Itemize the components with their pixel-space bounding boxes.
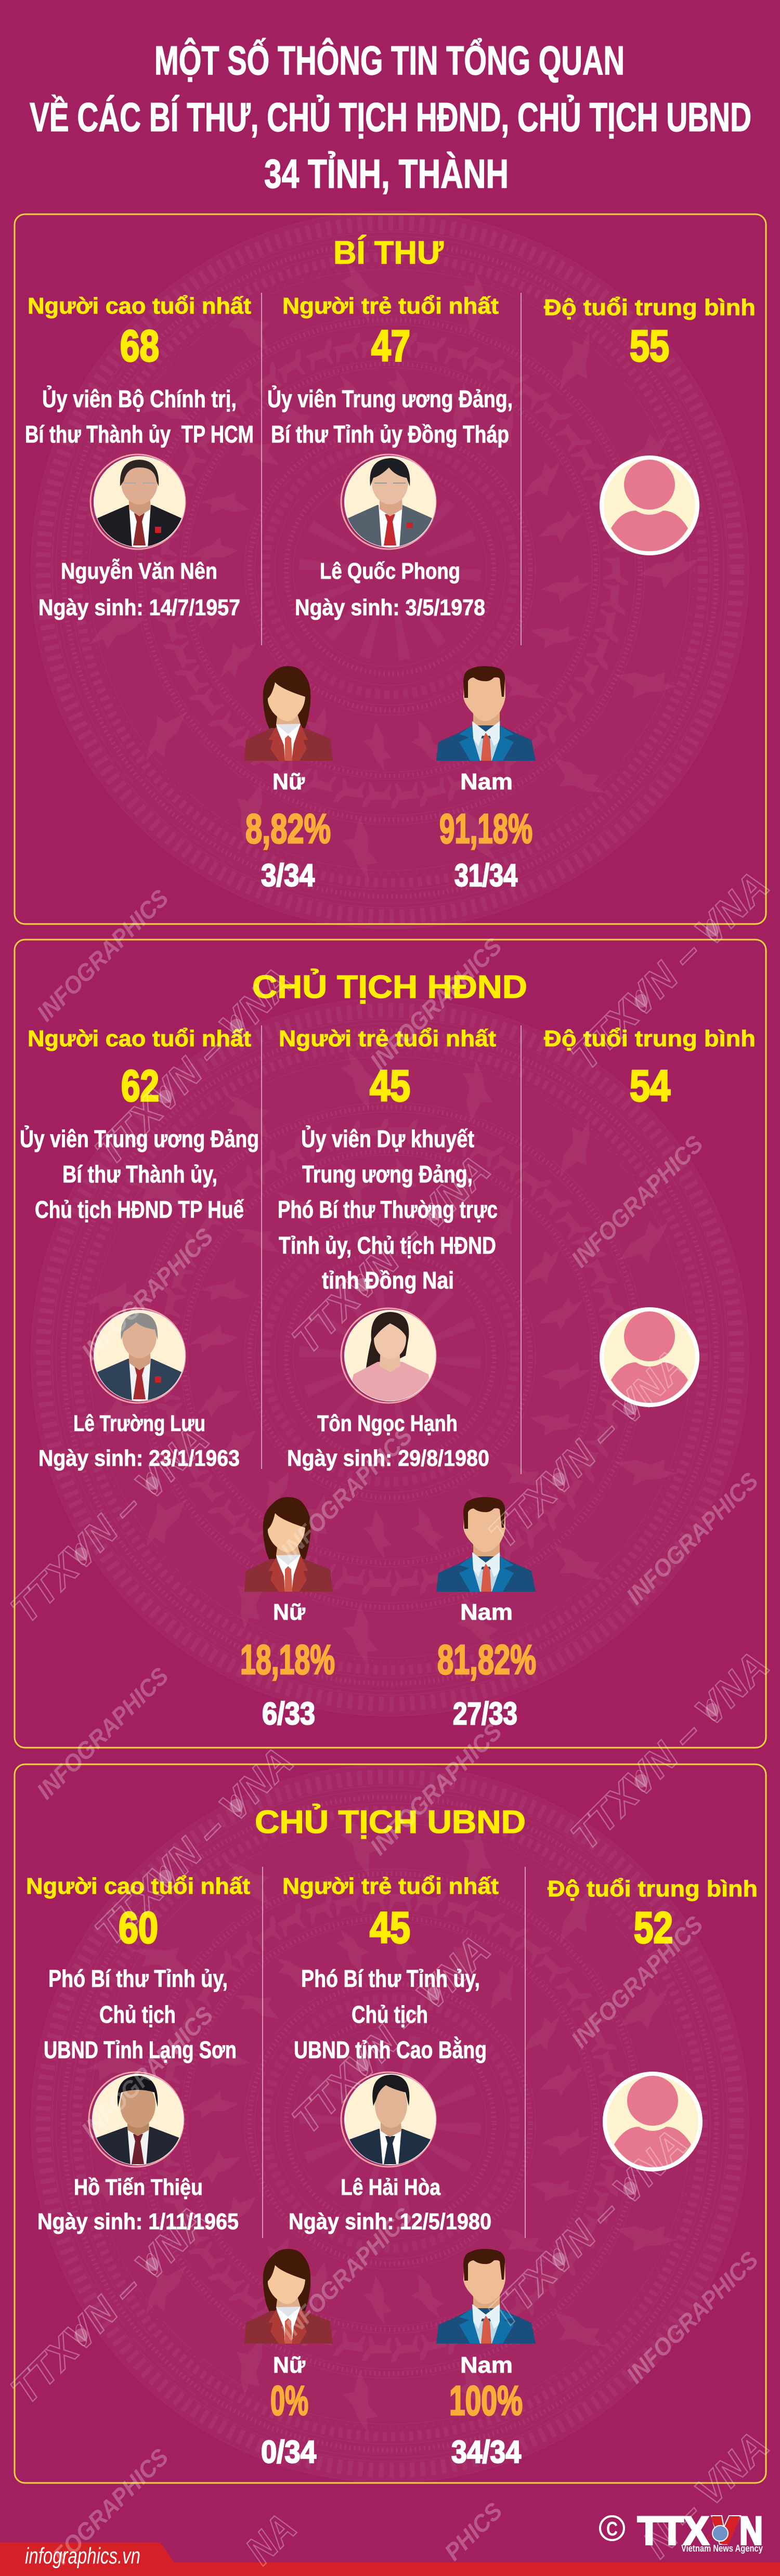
title: 34 TỈNH, THÀNH [264,151,509,197]
icon: anonymous person [600,456,699,555]
column: youngest: tỉnh Đồng Nai [322,1267,454,1294]
watermarks: INFOGRAPHICS [76,1222,218,1365]
column: average age [544,1026,756,1407]
column: oldest: Bí thư Thành ủy TP HCM [25,421,254,448]
column: oldest: Chủ tịch [99,2001,176,2028]
gender: women: 3/34 [261,858,315,893]
panel: Chủ tịch HĐND [15,940,766,1748]
watermarks: INFOGRAPHICS [31,884,174,1026]
portrait: Lê Hải Hòa [341,2072,437,2169]
column: youngest: Lê Quốc Phong [320,558,460,584]
column: oldest: Người cao tuổi nhất [28,1026,251,1051]
logo: TTXVN [600,2509,763,2554]
icon: anonymous person [603,2072,703,2171]
watermarks: INFOGRAPHICS [621,1467,763,1609]
watermarks: TTXVN – VNA [2,1416,218,1632]
background drum: panel 1 [0,147,749,929]
column: oldest: 68 [120,321,159,370]
watermarks: INFOGRAPHICS [566,1910,708,2053]
watermarks: FOGRAPHICS [47,2443,174,2569]
column: average age: 52 [634,1903,673,1952]
portrait: Lê Trường Lưu [90,1308,186,1405]
column: oldest: 60 [119,1903,158,1952]
gender: women: 0/34 [261,2435,317,2469]
column: youngest: Phó Bí thư Thường trực [278,1196,498,1223]
background drum: panel 2 [0,934,749,1716]
column: oldest [25,293,254,620]
portrait: Tôn Ngọc Hạnh [341,1308,437,1405]
column: average age [548,1876,758,2171]
title [30,37,751,197]
column: youngest: Ủy viên Dự khuyết [301,1125,474,1152]
column: average age: 54 [630,1061,670,1110]
gender: men [436,2249,536,2469]
logo: TTXVN: N [739,2509,763,2553]
watermarks: TTXVN – VNA [480,2122,696,2337]
gender: women: Nữ [272,769,305,795]
column: oldest: Phó Bí thư Tỉnh ủy, [48,1965,228,1992]
watermarks: TTXVN – VNA [283,1927,499,2142]
column: youngest: Lê Hải Hòa [341,2175,440,2200]
background drum: panel 3 [0,1700,749,2482]
column: youngest: Trung ương Đảng, [302,1161,473,1188]
portrait: Lê Quốc Phong [341,454,437,551]
column: youngest: 45 [370,1061,410,1110]
watermarks: TTXVN – VNA [2,2197,218,2413]
gender: women: 8,82% [245,805,331,852]
column: average age [544,295,756,555]
gender: women [244,2249,333,2469]
column: oldest: Ủy viên Bộ Chính trị, [42,385,237,412]
column: oldest: Nguyễn Văn Nên [61,558,217,584]
watermarks: INFOGRAPHICS [275,1422,418,1564]
column: oldest [20,1026,259,1471]
watermarks: N – VNA [634,2423,777,2566]
gender: women [244,666,333,893]
watermarks: TTXVN – VNA [562,1643,778,1858]
watermarks: INFOGRAPHICS [566,1130,708,1272]
column dividers [263,1867,525,2238]
gender: women: 18,18% [240,1636,335,1683]
column: youngest: UBND tỉnh Cao Bằng [294,2036,487,2063]
gender: men [436,666,536,893]
gender: women: 6/33 [262,1696,315,1731]
gender: men [436,1497,536,1731]
column: oldest: 62 [121,1061,159,1110]
gender: men: Nam [460,1599,513,1625]
logo: TTXVN: C [606,2518,618,2540]
watermarks: NA [237,2505,305,2573]
column: youngest: Ngày sinh: 12/5/1980 [289,2209,491,2234]
watermarks: TTXVN – VNA [562,863,778,1078]
column: youngest [282,1874,499,2234]
footer band [0,2542,780,2576]
panel: Chủ tịch UBND [15,1764,766,2483]
column: youngest: 47 [371,321,410,370]
column: youngest: Phó Bí thư Tỉnh ủy, [301,1965,480,1992]
column: average age: Độ tuổi trung bình [544,295,756,320]
logo: TTXVN: Vietnam News Agency [681,2543,763,2554]
column dividers [262,1025,521,1474]
column: youngest: Ủy viên Trung ương Đảng, [267,385,513,412]
column: oldest: Ủy viên Trung ương Đảng [20,1125,259,1152]
gender: men: 31/34 [454,858,518,893]
portrait: Hồ Tiến Thiệu [89,2072,185,2169]
watermarks: PHICS [439,2497,508,2566]
panel: Bí thư [15,214,766,924]
logo: TTXVN: TTX [638,2509,709,2553]
heading: Bí thư: BÍ THƯ [333,235,444,271]
column: youngest: Bí thư Tỉnh ủy Đồng Tháp [271,421,509,448]
icon: anonymous person [600,1307,699,1407]
gender: men: 81,82% [437,1636,536,1683]
column: oldest: Ngày sinh: 14/7/1957 [38,595,240,620]
column: oldest: Người cao tuổi nhất [26,1874,250,1899]
watermarks: TTXVN – VNA [283,1147,499,1362]
column: youngest: Người trẻ tuổi nhất [282,1874,499,1899]
heading: Chủ tịch UBND: CHỦ TỊCH UBND [255,1804,526,1840]
portrait: Nguyễn Văn Nên [90,454,186,551]
gender: men: 27/33 [453,1696,517,1731]
column: youngest [278,1026,498,1471]
gender: women: Nữ [273,1599,305,1625]
column: average age: 55 [630,321,669,370]
column: oldest: Chủ tịch HĐND TP Huế [35,1196,244,1223]
logo: TTXVN: V [710,2509,740,2553]
column: oldest: Ngày sinh: 23/1/1963 [38,1446,240,1471]
column: oldest: UBND Tỉnh Lạng Sơn [44,2036,237,2063]
watermarks: INFOGRAPHICS [621,2246,763,2388]
gender: men: 34/34 [451,2435,522,2469]
column: youngest: 45 [370,1903,410,1952]
column: oldest: Bí thư Thành ủy, [62,1161,217,1188]
column: youngest: Người trẻ tuổi nhất [282,293,499,319]
gender: women: 0% [270,2377,308,2424]
column: youngest: Ngày sinh: 29/8/1980 [287,1446,489,1471]
gender: women [240,1497,335,1731]
watermarks [2,863,778,2573]
column: oldest: Hồ Tiến Thiệu [74,2175,203,2200]
watermarks: INFOGRAPHICS [275,2202,418,2345]
gender: men: 91,18% [439,805,532,852]
gender: men: Nam [460,2352,513,2378]
watermarks: INFOGRAPHICS [31,1662,174,1804]
column: youngest: Người trẻ tuổi nhất [279,1026,496,1051]
watermarks: INFOGRAPHICS [365,1718,507,1860]
watermarks: INFOGRAPHICS [76,2001,218,2143]
source: infographics.vn [25,2543,140,2569]
column: youngest: Ngày sinh: 3/5/1978 [295,595,485,620]
column: youngest: Tôn Ngọc Hạnh [317,1411,458,1436]
column: youngest [267,293,513,620]
watermarks: TTXVN – VNA [480,1342,696,1557]
column: youngest: Tỉnh ủy, Chủ tịch HĐND [279,1232,496,1259]
gender: men: Nam [460,769,513,795]
column: average age: Độ tuổi trung bình [548,1876,758,1902]
column: oldest: Lê Trường Lưu [73,1411,205,1436]
column: oldest: Người cao tuổi nhất [28,293,251,319]
column: oldest: Ngày sinh: 1/11/1965 [37,2209,239,2234]
column: oldest [26,1874,250,2234]
heading: Chủ tịch HĐND: CHỦ TỊCH HĐND [252,969,527,1005]
column: youngest: Chủ tịch [352,2001,428,2028]
gender: men: 100% [449,2377,523,2424]
watermarks: INFOGRAPHICS [365,932,507,1075]
column dividers [262,293,521,645]
gender: women: Nữ [273,2352,305,2378]
column: average age: Độ tuổi trung bình [544,1026,756,1051]
watermarks: TTXVN – VNA [86,959,302,1174]
watermarks: TTXVN – VNA [86,1739,302,1954]
